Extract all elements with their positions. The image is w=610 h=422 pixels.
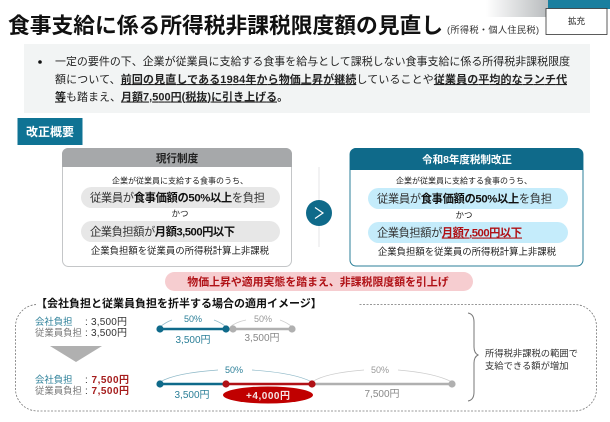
panel: application image: 【会社負担と従業員負担を折半する場合の適用イメージ】 [36, 296, 322, 310]
panel: current system: 従業員が食事価額の50%以上を負担 [90, 190, 265, 204]
panel: summary text: 一定の要件の下、企業が従業員に支給する食事を給与として課税しない食事支給に係る所得税非課税限度 [55, 54, 570, 68]
panel: revised system: かつ [455, 210, 473, 220]
before: amounts [35, 316, 127, 339]
bar chart: after: +4,000円 [246, 390, 290, 402]
title: (所得税・個人住民税) [447, 24, 539, 35]
bar chart: before: 3,500円 [244, 333, 280, 344]
tag: 拡充: 拡充 [568, 16, 585, 26]
bar chart: after: 50% [225, 365, 243, 375]
after: amounts: : 7,500円 [85, 385, 129, 397]
before: amounts: 従業員負担 [35, 327, 82, 338]
corner decoration [486, 0, 610, 17]
panel: summary text: 等も踏まえ、月額7,500円(税抜)に引き上げる。 [55, 90, 288, 104]
brace [468, 313, 478, 401]
panel: current system: 企業が従業員に支給する食事のうち、 [112, 176, 248, 186]
panel: application image [16, 296, 596, 411]
heading: 改正概要 [18, 118, 82, 145]
panel: current system: 企業負担額が月額3,500円以下 [90, 224, 235, 238]
panel: revised system [350, 148, 583, 266]
panel: current system [62, 148, 292, 266]
bar chart: after [156, 365, 456, 404]
arrow: current to revised [306, 167, 332, 247]
after: amounts: 従業員負担 [35, 385, 82, 396]
panel: current system: 現行制度 [156, 152, 199, 165]
note: effect of change: 所得税非課税の範囲で [485, 348, 578, 358]
callout: reason for raising: 物価上昇や適用実態を踏まえ、非課税限度額を引上げ [187, 274, 449, 288]
panel: summary text: 額について、前回の見直しである1984年から物価上昇が継続していることや従業員の平均的なランチ代 [55, 72, 567, 86]
after: amounts: 会社負担 [35, 374, 73, 385]
bar chart: after: 3,500円 [174, 390, 210, 401]
note: effect of change: 支給できる額が増加 [485, 360, 568, 371]
after: amounts: : 7,500円 [85, 374, 129, 386]
panel: current system: かつ [171, 208, 189, 218]
before: amounts: 会社負担 [35, 316, 73, 327]
panel: revised system: 企業が従業員に支給する食事のうち、 [396, 176, 532, 186]
panel: summary text [24, 44, 590, 113]
tag: 拡充 [546, 8, 607, 34]
before: amounts: : 3,500円 [85, 328, 127, 339]
note: effect of change [485, 348, 578, 371]
before: amounts: : 3,500円 [85, 317, 127, 328]
bar chart: after: 7,500円 [364, 389, 400, 400]
panel: revised system: 企業負担額が月額7,500円以下 [377, 226, 522, 240]
bar chart: after: 50% [371, 365, 389, 375]
bar chart: before: 3,500円 [175, 335, 211, 346]
arrow: down triangle [50, 346, 102, 362]
panel: revised system: 令和8年度税制改正 [422, 153, 512, 166]
after: amounts [35, 374, 129, 397]
panel: current system: 企業負担額を従業員の所得税計算上非課税 [91, 245, 270, 256]
bar chart: before: 50% [254, 314, 272, 324]
panel: revised system: 従業員が食事価額の50%以上を負担 [377, 192, 552, 206]
heading: 改正概要: 改正概要 [26, 124, 74, 139]
callout: reason for raising [165, 272, 473, 291]
bar chart: before [156, 314, 296, 346]
title: 食事支給に係る所得税非課税限度額の見直し [8, 13, 443, 38]
panel: revised system: 企業負担額を従業員の所得税計算上非課税 [378, 246, 557, 257]
bar chart: before: 50% [184, 314, 202, 324]
